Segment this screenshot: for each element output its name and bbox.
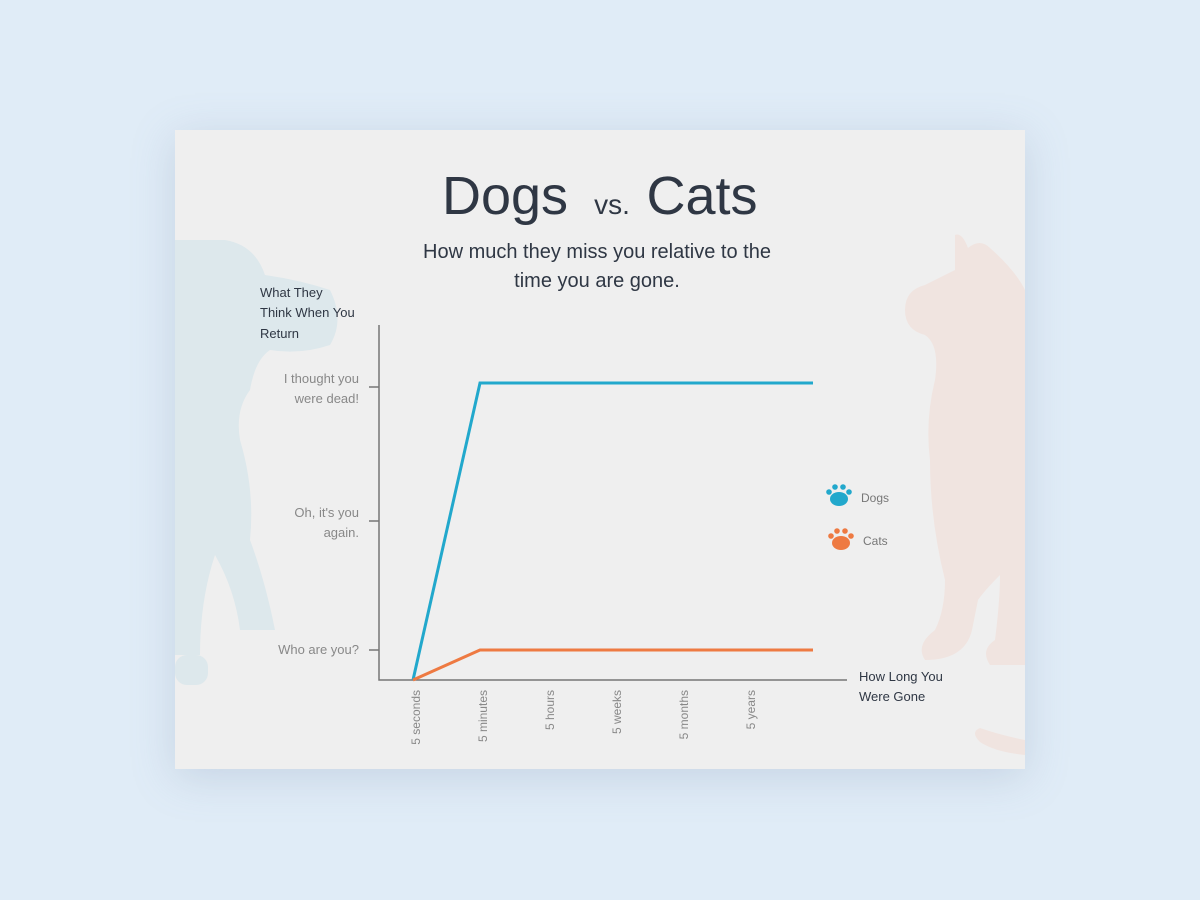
subtitle: How much they miss you relative to the [423,241,771,263]
cats line [413,650,813,680]
y labels: Oh, it's you [294,505,359,520]
y axis title: Return [260,326,299,341]
axes [369,325,847,680]
legend: Cats [863,534,888,548]
x axis title: How Long You [859,669,943,684]
subtitle [423,241,771,292]
title: vs. [594,189,630,220]
y labels: I thought you [284,371,359,386]
x labels: 5 weeks [610,690,624,734]
x axis title: Were Gone [859,689,925,704]
dog silhouette [175,240,338,685]
legend [826,484,889,550]
y axis title: What They [260,285,323,300]
x labels [409,690,758,745]
title [442,166,758,226]
x labels: 5 seconds [409,690,423,745]
x labels: 5 minutes [476,690,490,742]
x labels: 5 hours [543,690,557,730]
y labels: again. [324,525,359,540]
y labels: Who are you? [278,642,359,657]
x labels: 5 months [677,690,691,739]
cat silhouette [905,235,1025,755]
legend: Dogs [861,491,889,505]
x axis title [859,669,943,704]
card [175,130,1025,769]
y labels [278,371,359,657]
y axis title [260,285,355,341]
y axis title: Think When You [260,305,355,320]
y labels: were dead! [294,391,359,406]
x labels: 5 years [744,690,758,729]
title: Cats [646,166,758,226]
title: Dogs [442,166,568,226]
subtitle: time you are gone. [514,270,680,292]
dogs line [413,383,813,680]
